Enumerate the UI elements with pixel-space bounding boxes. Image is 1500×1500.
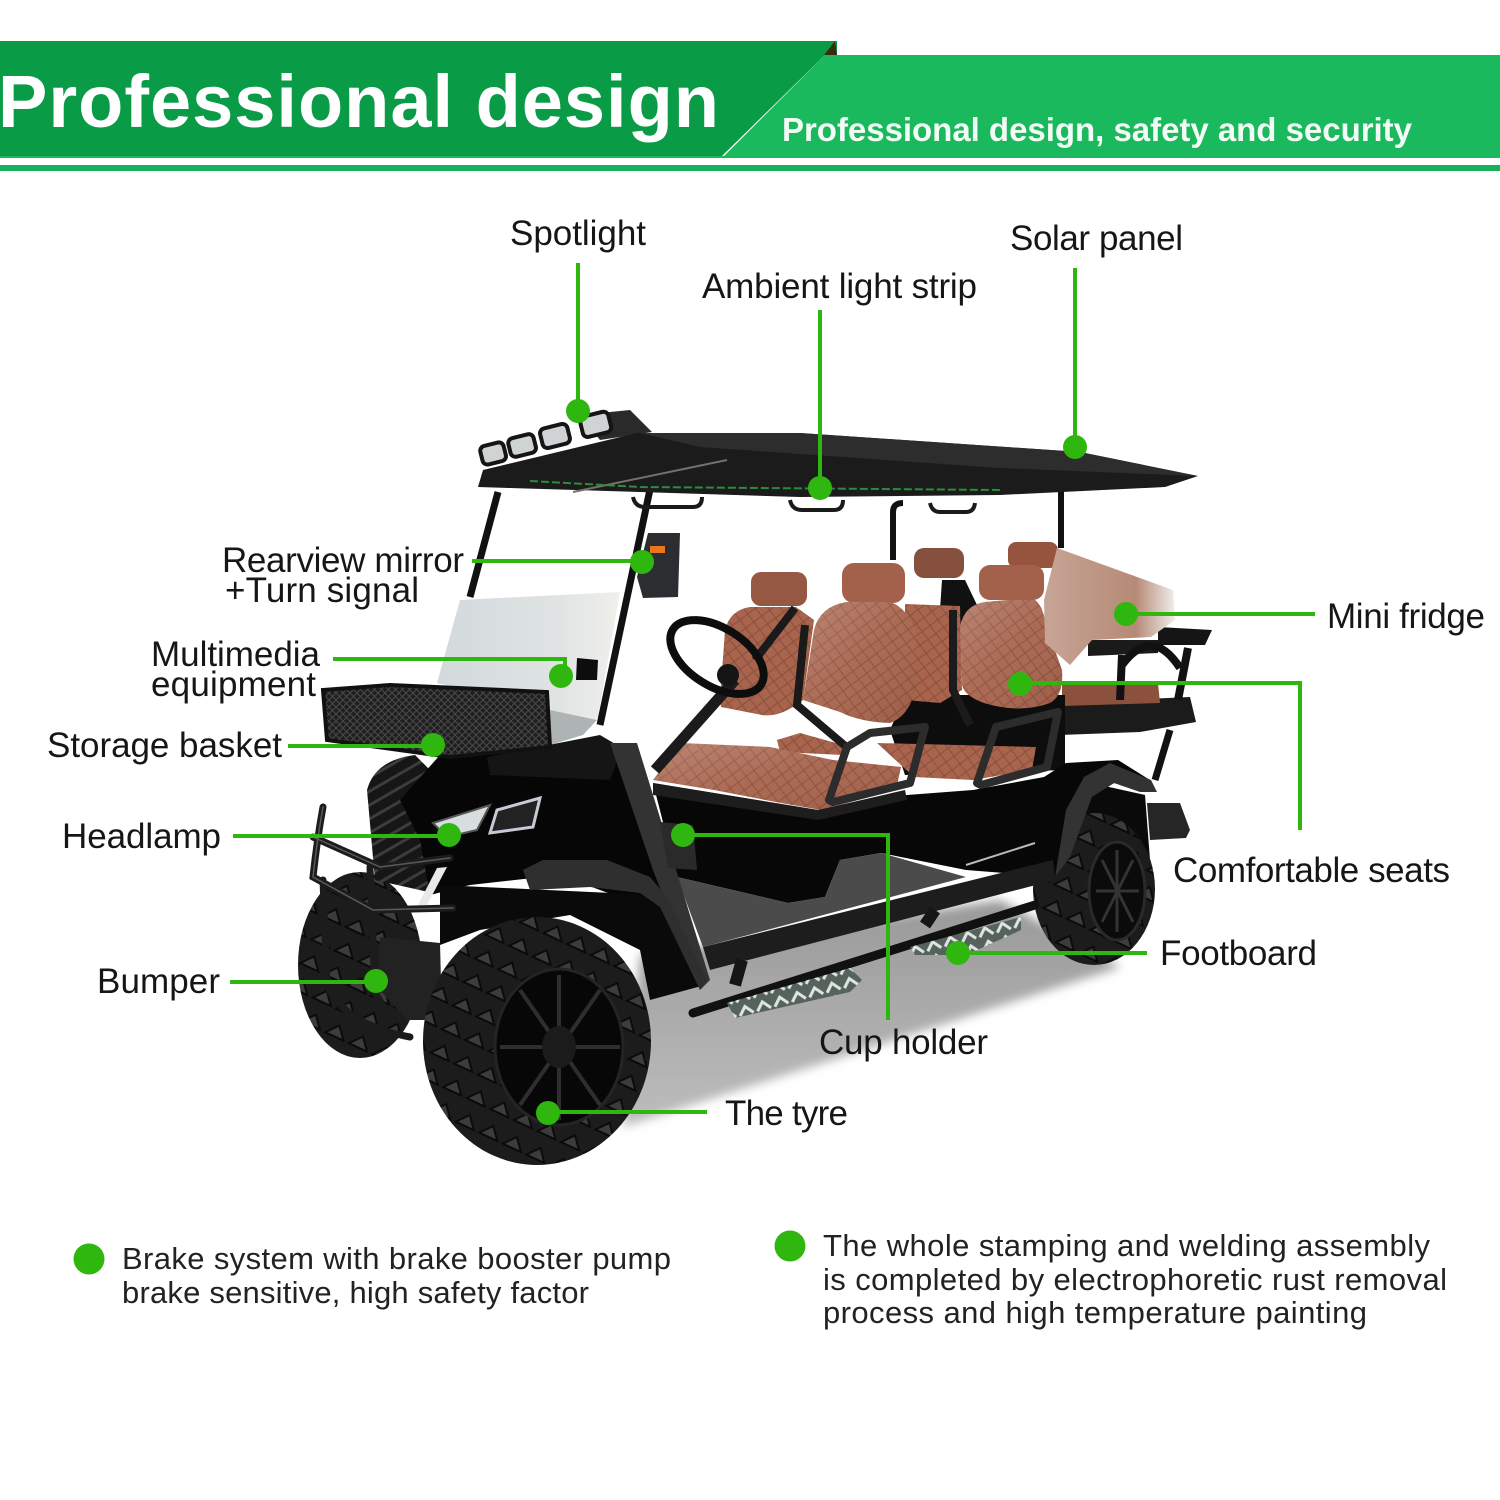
dark seat frame: [890, 695, 1065, 775]
feature note: stamping and welding: [774, 1228, 1447, 1330]
chrome trim: [966, 843, 1035, 865]
callout: Rearview mirror + Turn signal: +Turn signal: [225, 571, 419, 610]
roof: [478, 410, 1198, 512]
callout: Spotlight: Spotlight: [510, 214, 646, 253]
dashboard: [550, 710, 597, 745]
windshield: [437, 592, 620, 743]
bumper guard: [313, 807, 453, 1037]
floor mat: [677, 853, 966, 947]
front wheel arch: [440, 885, 705, 1000]
ground shadow: [623, 900, 1121, 1127]
callout: Multimedia equipment: Multimedia: [151, 635, 321, 674]
under basket bracket: [487, 735, 622, 780]
header banner: [0, 41, 1500, 171]
hood and nose: [400, 745, 700, 975]
rear footrest and struts: [1058, 627, 1212, 840]
callout: Multimedia equipment: [151, 635, 573, 704]
subtitle: Professional design, safety and security: [782, 111, 1413, 148]
rear wheel: [1033, 813, 1155, 965]
front seat backs: [720, 563, 917, 750]
callout: Solar panel: [1010, 219, 1183, 459]
callout: Cup holder: [671, 823, 988, 1062]
mirror: [637, 533, 680, 598]
fender flare: [523, 860, 707, 990]
back front wheel: [298, 872, 422, 1058]
title: Professional design: [0, 60, 719, 143]
feature note: brake system: [74, 1241, 671, 1310]
callout: The tyre: The tyre: [725, 1094, 848, 1133]
bumper block: [377, 937, 442, 1020]
cup holder: [660, 822, 697, 870]
spotlights: [479, 411, 612, 466]
callout: Comfortable seats: [1008, 672, 1450, 890]
rear cushion: [777, 733, 1036, 780]
callout: Spotlight: [510, 214, 646, 423]
callout: Multimedia equipment: equipment: [151, 665, 316, 704]
golf cart illustration: [298, 410, 1212, 1165]
side sill: [703, 860, 1055, 970]
armrests: [829, 712, 1058, 802]
feature note: stamping and welding: process and high temperature painting: [823, 1295, 1367, 1330]
seat base and rear body: [653, 760, 1150, 903]
callout: Storage basket: [47, 726, 445, 765]
front wheel: [423, 917, 651, 1165]
callout: Mini fridge: [1114, 597, 1485, 636]
callout: Ambient light strip: [702, 267, 977, 500]
callout: Footboard: [946, 934, 1317, 973]
feature note: stamping and welding: is completed by electrophoretic rust removal: [823, 1262, 1447, 1297]
basket: [323, 685, 550, 757]
rear posts: [893, 490, 1061, 560]
rear wheel arch: [1060, 785, 1150, 900]
rear fender: [1055, 763, 1157, 877]
headlamps: [418, 798, 540, 905]
callout: Footboard: Footboard: [1160, 934, 1317, 973]
feature note: stamping and welding: The whole stamping and welding assembly: [823, 1228, 1430, 1263]
callout: Cup holder: Cup holder: [819, 1023, 988, 1062]
multimedia device: [576, 658, 598, 680]
callout: Bumper: Bumper: [97, 962, 220, 1001]
roof pillars: [470, 457, 670, 725]
callout: Headlamp: Headlamp: [62, 817, 221, 856]
front cushion: [653, 743, 901, 810]
rear seats: [905, 542, 1062, 725]
callout: Ambient light strip: Ambient light strip: [702, 267, 977, 306]
grille: [367, 755, 440, 893]
callout: Solar panel: Solar panel: [1010, 219, 1183, 258]
callout: Storage basket: Storage basket: [47, 726, 282, 765]
running board: [693, 905, 1035, 1018]
feature note: brake system: Brake system with brake booster pump: [122, 1241, 671, 1276]
mini fridge wrapped in plastic: [1044, 548, 1175, 665]
windshield post: [610, 743, 710, 990]
steering wheel: [655, 605, 776, 770]
callout: Comfortable seats: Comfortable seats: [1173, 851, 1450, 890]
callout: Mini fridge: Mini fridge: [1327, 597, 1485, 636]
callout: Headlamp: [62, 817, 461, 856]
callout: The tyre: [536, 1094, 848, 1133]
feature note: brake system: brake sensitive, high safety factor: [122, 1275, 589, 1310]
seat ledge: [653, 783, 907, 820]
callout: Rearview mirror + Turn signal: Rearview mirror: [222, 541, 464, 580]
callout: Rearview mirror + Turn signal: [222, 541, 654, 610]
callout: Bumper: [97, 962, 388, 1001]
